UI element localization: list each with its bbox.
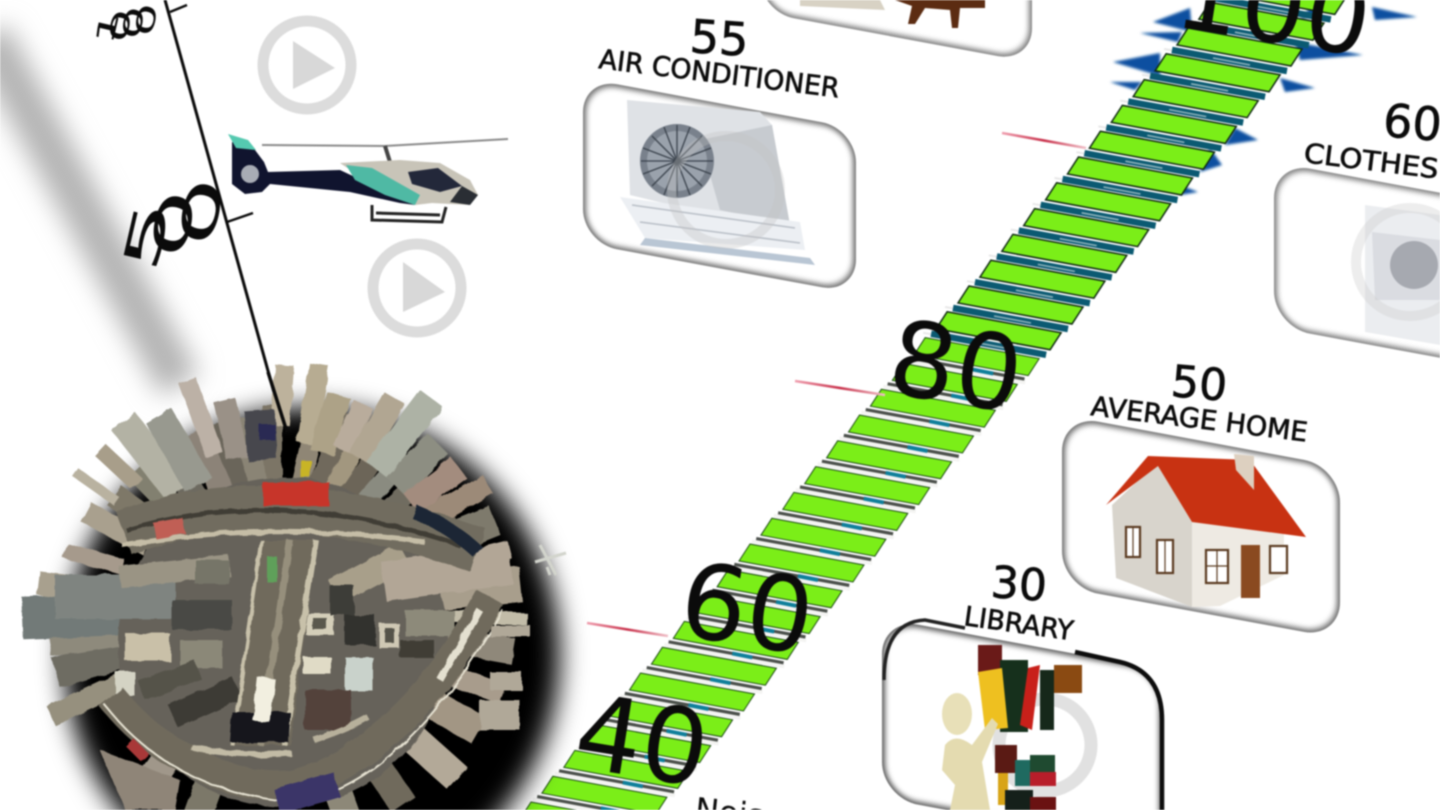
- highway: vertical: [230, 540, 318, 745]
- play icon: lower: [373, 244, 461, 332]
- axis end over city: [268, 372, 287, 432]
- label LIBRARY: LIBRARY: [962, 601, 1076, 647]
- blue spikes behind ribbon: [1110, 0, 1417, 195]
- value 55: 55: [688, 9, 750, 67]
- icon: helicopter: [228, 134, 508, 222]
- vehicle: red car lower: [127, 739, 149, 761]
- scale label 500: 5: [112, 194, 183, 278]
- card frame: [583, 78, 856, 294]
- scale label 1000: 0: [102, 6, 138, 45]
- scale label 500: 0: [167, 172, 237, 253]
- panel: library: [882, 557, 1162, 810]
- play icon: upper: [263, 21, 351, 109]
- vehicle: green car: [267, 556, 277, 582]
- ribbon value 40: 40: [567, 670, 717, 810]
- little planet city: [21, 363, 530, 810]
- ribbon value 60: 60: [672, 538, 822, 679]
- ring behind books: [999, 699, 1091, 791]
- globe shadow: [64, 407, 560, 810]
- vehicle: yellow car: [301, 460, 311, 478]
- highway: lower ring: [111, 597, 490, 786]
- ribbon value 80: 80: [881, 296, 1031, 437]
- card frame: [1062, 415, 1340, 639]
- value 50: 50: [1169, 356, 1229, 412]
- scale label 500: [112, 172, 237, 278]
- lower-left building patch: [100, 750, 180, 810]
- altitude scale: [89, 0, 285, 432]
- city disc: [118, 477, 448, 807]
- icon: AC unit: [620, 100, 815, 265]
- scale label 1000: 0: [128, 0, 164, 39]
- card dark top-left edge: [884, 620, 965, 680]
- tiny plane: [535, 545, 566, 575]
- right-side buildings on shadow: [480, 625, 530, 730]
- icon: bookshelf: [942, 645, 1082, 810]
- panel: average home: [1062, 356, 1340, 639]
- radial buildings: back row: [107, 403, 470, 578]
- red tick: lower: [587, 623, 668, 636]
- vehicle: red bus: [263, 482, 329, 506]
- panel: top card (dining room): [760, 0, 1032, 62]
- card frame: [882, 618, 1162, 810]
- icon: dryer: [1356, 205, 1440, 345]
- vehicle: purple truck: [274, 772, 340, 810]
- vehicle: red car: [153, 518, 185, 538]
- scale label 1000: 0: [115, 3, 151, 42]
- label AIR CONDITIONER: AIR CONDITIONER: [597, 44, 841, 104]
- label AVERAGE HOME: AVERAGE HOME: [1089, 391, 1309, 449]
- card dark top-right edge: [1075, 652, 1162, 810]
- radial buildings: [21, 363, 527, 810]
- highway: upper arc: [124, 509, 478, 550]
- red tick: middle: [795, 381, 885, 395]
- panel: clothes dryer: [1274, 93, 1440, 377]
- scale label 1000: [89, 0, 164, 47]
- card frame: [1274, 162, 1440, 377]
- value 30: 30: [989, 557, 1049, 612]
- inner blocks: [55, 543, 513, 730]
- red tick: upper: [1002, 133, 1086, 148]
- chart: decibel ribbon of green bars: [511, 0, 1346, 810]
- scale label 500: 0: [139, 184, 209, 265]
- axis shadow: [0, 35, 180, 385]
- scale label 1000: 1: [89, 8, 125, 47]
- icon: house: [1106, 454, 1306, 607]
- vehicle: navy car: [259, 424, 275, 440]
- panel: air conditioner: [583, 9, 856, 294]
- vehicle: white truck: [253, 677, 275, 723]
